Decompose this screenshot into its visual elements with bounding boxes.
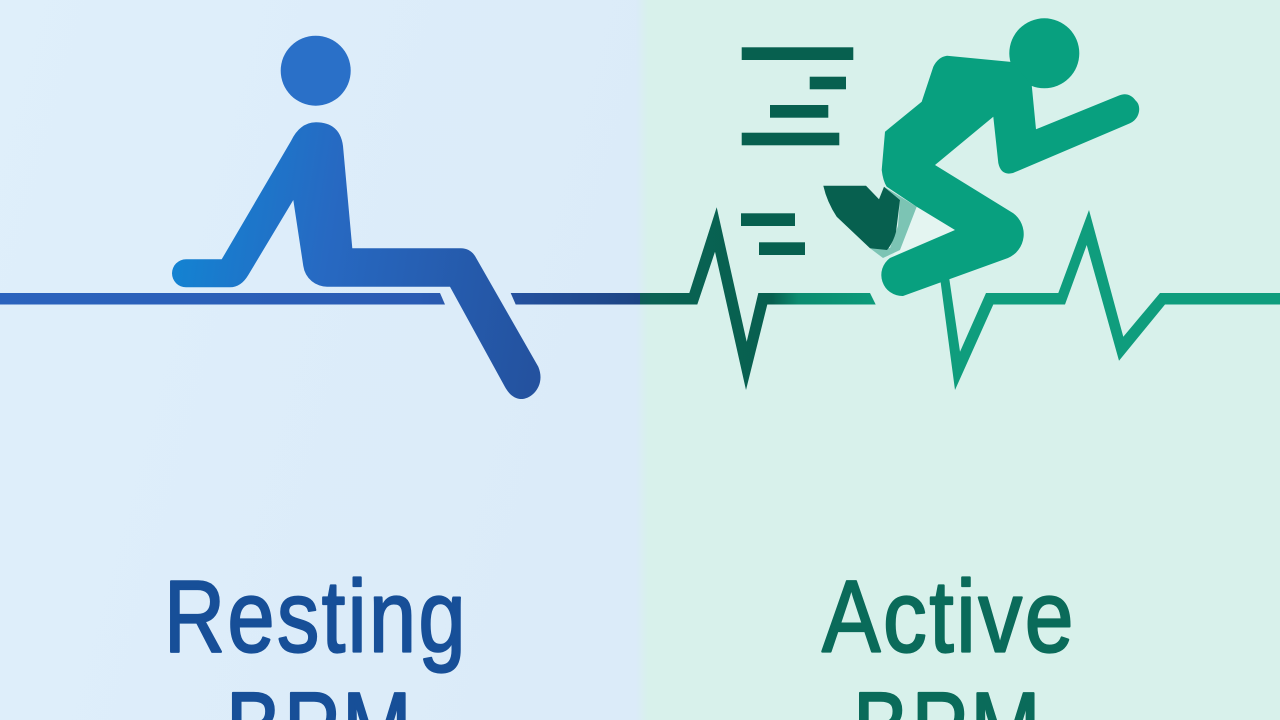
icon: seated person bbox=[172, 36, 541, 399]
label: Resting: Resting bbox=[164, 560, 468, 674]
heartbeat line: green segment bbox=[939, 210, 1280, 390]
label: Active: Active bbox=[822, 560, 1076, 674]
pale gap behind knee bbox=[893, 206, 955, 256]
rear foot bbox=[823, 186, 900, 250]
baseline: resting heart-rate line bbox=[0, 293, 640, 304]
rear foot band bbox=[870, 187, 917, 258]
heading: Active BPM bbox=[822, 560, 1076, 720]
runner body bbox=[881, 56, 1139, 296]
icon: speed lines bbox=[741, 47, 853, 255]
heading: Resting BPM bbox=[164, 560, 468, 720]
panel: active background bbox=[636, 0, 1280, 720]
panel: resting background bbox=[0, 0, 640, 720]
runner head bbox=[1009, 18, 1079, 88]
icon: running person bbox=[823, 18, 1139, 296]
heartbeat line: dark segment bbox=[640, 207, 876, 390]
